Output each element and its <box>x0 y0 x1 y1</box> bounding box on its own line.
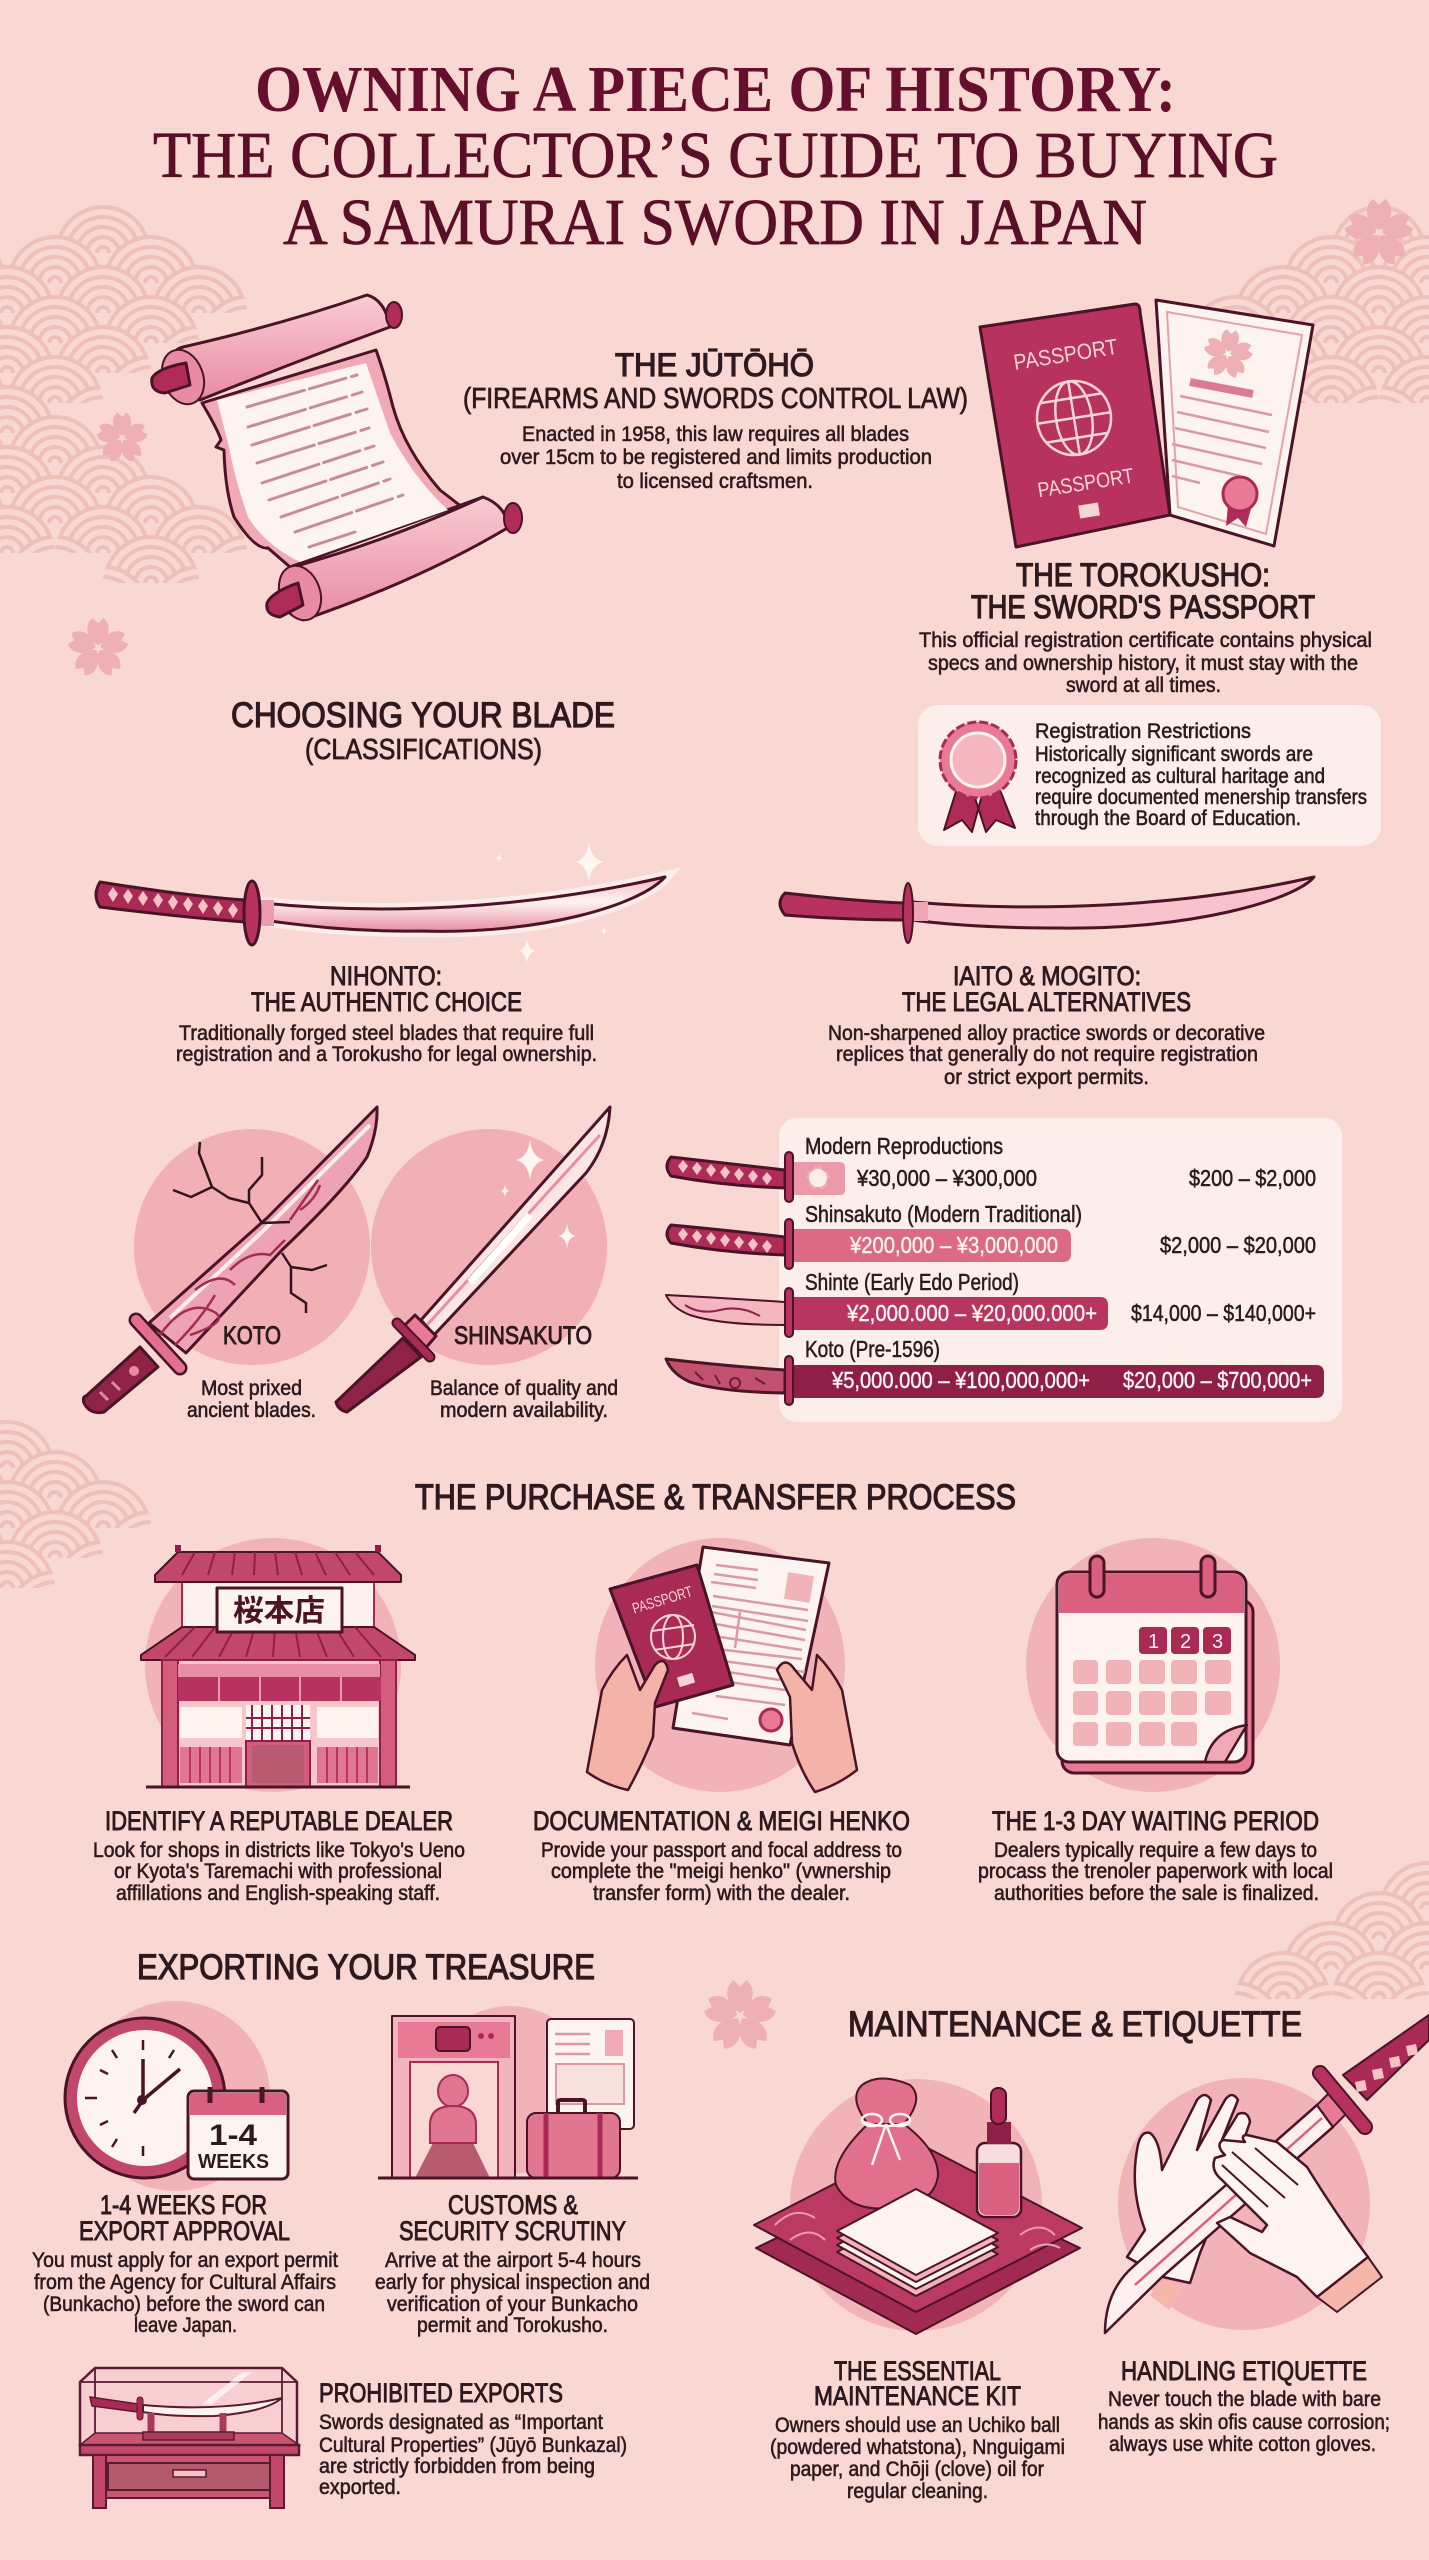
section: identify dealer text: Look for shops in districts like Tokyo's Ueno <box>93 1838 465 1862</box>
section: Torokusho text: THE TOROKUSHO: <box>1016 557 1270 593</box>
icon: blossom left <box>95 412 149 464</box>
passport cover text: PASSPORT <box>1012 334 1119 375</box>
shinsakuto blade <box>421 1107 610 1335</box>
mini calendar <box>188 2087 288 2179</box>
section: documentation text: complete the "meigi henko" (vwnership <box>551 1859 891 1883</box>
section: waiting period text: authorities before the sale is finalized. <box>994 1881 1319 1905</box>
row: koto: ¥5,000.000 – ¥100,000,000+ <box>831 1367 1090 1393</box>
row: shinte: Shinte (Early Edo Period) <box>805 1269 1019 1295</box>
row: koto <box>666 1336 1324 1405</box>
section: customs text: Arrive at the airport 5-4 hours <box>385 2248 641 2272</box>
row: shinsakuto <box>667 1201 1316 1269</box>
section: export approval text: leave Japan. <box>134 2313 237 2337</box>
person <box>415 2075 490 2178</box>
section: Jutoho text: (FIREARMS AND SWORDS CONTROL LAW) <box>463 383 968 415</box>
section: iaito text: IAITO & MOGITO: <box>953 961 1141 991</box>
parchment <box>202 350 483 567</box>
section: prohibited exports text <box>319 2378 627 2499</box>
section: nihonto text <box>176 961 597 1066</box>
section: Jutoho text: THE JŪTŌHŌ <box>615 347 814 383</box>
section: maintenance kit text: paper, and Chōji (clove) oil for <box>790 2457 1044 2481</box>
sword in case <box>90 2397 282 2420</box>
section: iaito text: or strict export permits. <box>944 1065 1149 1089</box>
illustration: shinsakuto: modern availability. <box>440 1398 608 1422</box>
left forearm <box>1150 2280 1182 2310</box>
section: maintenance kit text: regular cleaning. <box>847 2479 988 2503</box>
row: modern reproductions <box>667 1133 1316 1202</box>
illustration: shinsakuto: SHINSAKUTO <box>454 1322 592 1350</box>
heading: choosing your blade <box>231 696 615 766</box>
icon: shop <box>141 1538 415 1792</box>
row: shinsakuto: $2,000 – $20,000 <box>1160 1232 1316 1258</box>
icon: passport and certificate: PASSPORT <box>1036 464 1136 502</box>
section: documentation text <box>533 1806 910 1905</box>
shinsakuto handle and guard <box>336 1315 436 1412</box>
days 1 2 3: 1 <box>1148 1631 1159 1653</box>
globe <box>1032 376 1116 460</box>
section: waiting period text <box>978 1806 1333 1905</box>
panel: registration restrictions: require documented menership transfers <box>1035 785 1367 809</box>
cloth bag <box>835 2078 938 2209</box>
section: maintenance kit text <box>770 2356 1065 2503</box>
icon: white gloves handling sword <box>1105 2015 1429 2333</box>
right glove <box>1214 2135 1368 2297</box>
section: export approval text: 1-4 WEEKS FOR <box>100 2190 267 2220</box>
icon: clock and calendar <box>65 2001 288 2191</box>
icon: rosette <box>940 722 1016 832</box>
bottom roller <box>267 497 522 626</box>
illustration: shinsakuto: Balance of quality and <box>430 1376 618 1400</box>
mini calendar: 1-4 <box>209 2119 257 2152</box>
koto blade <box>149 1107 377 1353</box>
section: documentation text: transfer form) with the dealer. <box>593 1881 850 1905</box>
icon: scroll <box>152 295 522 626</box>
section: maintenance kit text: (powdered whatstona), Nnguigami <box>770 2435 1065 2459</box>
row: shinsakuto: ¥200,000 – ¥3,000,000 <box>849 1232 1058 1258</box>
left hand <box>587 1655 668 1790</box>
illustration: shinsakuto <box>336 1107 618 1422</box>
section: handling etiquette text: always use white cotton gloves. <box>1109 2432 1376 2456</box>
section: identify dealer text: or Kyota's Taremachi with professional <box>114 1859 442 1883</box>
section: prohibited exports text: Cultural Properties” (Jūyō Bunkazal) <box>319 2433 627 2457</box>
section: nihonto text: Traditionally forged steel blades that require full <box>179 1021 594 1045</box>
section: customs text: verification of your Bunkacho <box>387 2292 638 2316</box>
panel: registration restrictions: through the Board of Education. <box>1035 806 1301 830</box>
title: THE COLLECTOR’S GUIDE TO BUYING <box>153 119 1278 192</box>
section: maintenance kit text: THE ESSENTIAL <box>834 2356 1001 2386</box>
section: waiting period text: Dealers typically require a few days to <box>994 1838 1317 1862</box>
section: iaito text: replices that generally do not require registration <box>836 1042 1258 1066</box>
right hand <box>777 1655 857 1792</box>
papers <box>837 2189 998 2296</box>
title: A SAMURAI SWORD IN JAPAN <box>283 186 1147 259</box>
section: export approval text: EXPORT APPROVAL <box>79 2216 290 2246</box>
row: shinte <box>666 1269 1316 1337</box>
section: prohibited exports text: Swords designated as “Important <box>319 2410 603 2434</box>
section: Jutoho text <box>463 347 968 493</box>
row: shinte: ¥2,000.000 – ¥20,000.000+ <box>846 1300 1097 1326</box>
section: handling etiquette text: HANDLING ETIQUETTE <box>1121 2356 1367 2386</box>
panel: registration restrictions: Registration Restrictions <box>1035 719 1251 743</box>
days 1 2 3: 3 <box>1212 1631 1223 1653</box>
heading: maintenance: MAINTENANCE & ETIQUETTE <box>848 2005 1302 2044</box>
icon: calendar <box>1026 1538 1280 1792</box>
panel: registration restrictions: Historically significant swords are <box>1035 742 1313 766</box>
section: nihonto text: NIHONTO: <box>330 961 442 991</box>
section: export approval text: (Bunkacho) before the sword can <box>43 2292 325 2316</box>
left glove <box>1127 2095 1250 2283</box>
heading: exporting: EXPORTING YOUR TREASURE <box>137 1948 595 1987</box>
illustration: nihonto sword <box>96 842 665 963</box>
title: OWNING A PIECE OF HISTORY: <box>255 53 1176 126</box>
icon: blossom lower left <box>66 618 130 678</box>
section: identify dealer text: IDENTIFY A REPUTABLE DEALER <box>105 1806 453 1836</box>
section: Torokusho text: This official registration certificate contains physical <box>919 628 1372 652</box>
icon: display case <box>80 2368 299 2508</box>
section: handling etiquette text <box>1098 2356 1390 2456</box>
shop sign: 桜本店 <box>233 1595 325 1628</box>
illustration: koto: KOTO <box>223 1322 281 1350</box>
section: maintenance kit text: Owners should use an Uchiko ball <box>775 2413 1060 2437</box>
row: modern reproductions: ¥30,000 – ¥300,000 <box>856 1165 1037 1191</box>
top roller <box>152 295 402 410</box>
days 1 2 3: 2 <box>1180 1631 1191 1653</box>
section: prohibited exports text: exported. <box>319 2475 401 2499</box>
right forearm <box>1317 2257 1382 2312</box>
section: waiting period text: THE 1-3 DAY WAITING PERIOD <box>992 1806 1319 1836</box>
cloth <box>754 2142 1082 2334</box>
section: Torokusho text: sword at all times. <box>1066 673 1221 697</box>
certificate <box>1156 300 1313 546</box>
illustration: koto: ancient blades. <box>187 1398 316 1422</box>
decorative wave pattern: lower right <box>1235 1861 1429 1999</box>
panel: registration restrictions: recognized as cultural haritage and <box>1035 764 1325 788</box>
section: Jutoho text: to licensed craftsmen. <box>617 469 813 493</box>
section: documentation text: Provide your passport and focal address to <box>541 1838 902 1862</box>
section: prohibited exports text: are strictly forbidden from being <box>319 2454 595 2478</box>
title <box>153 53 1278 259</box>
document <box>547 2019 634 2129</box>
decorative wave pattern: middle left <box>0 1420 151 1588</box>
heading: choosing your blade: CHOOSING YOUR BLADE <box>231 696 615 735</box>
section: customs text: early for physical inspection and <box>375 2270 650 2294</box>
row: koto: $20,000 – $700,000+ <box>1123 1367 1312 1393</box>
section: prohibited exports text: PROHIBITED EXPORTS <box>319 2378 563 2408</box>
illustration: koto: Most prixed <box>201 1376 302 1400</box>
section: Jutoho text: over 15cm to be registered and limits production <box>500 445 932 469</box>
icon: maintenance kit <box>754 2078 1082 2334</box>
icon: hands holding passport and form <box>587 1538 857 1792</box>
passport: PASSPORT <box>630 1583 695 1618</box>
illustration: koto <box>83 1107 377 1422</box>
section: iaito text: Non-sharpened alloy practice swords or decorative <box>828 1021 1265 1045</box>
section: export approval text: You must apply for an export permit <box>32 2248 338 2272</box>
decorative wave pattern: upper left <box>0 205 247 583</box>
oil bottle <box>977 2088 1021 2217</box>
mini calendar: WEEKS <box>198 2151 269 2173</box>
row: koto: Koto (Pre-1596) <box>805 1336 940 1362</box>
section: Torokusho text: THE SWORD'S PASSPORT <box>971 589 1315 625</box>
section: export approval text <box>32 2190 338 2337</box>
section: handling etiquette text: Never touch the blade with bare <box>1108 2387 1381 2411</box>
section: nihonto text: registration and a Torokusho for legal ownership. <box>176 1042 597 1066</box>
section: nihonto text: THE AUTHENTIC CHOICE <box>251 987 522 1017</box>
section: customs text: permit and Torokusho. <box>417 2313 608 2337</box>
katana <box>1105 2015 1429 2333</box>
cracks <box>173 1142 327 1313</box>
panel: price table <box>666 1118 1342 1422</box>
panel: registration restrictions <box>918 705 1381 846</box>
section: export approval text: from the Agency for Cultural Affairs <box>34 2270 336 2294</box>
passport <box>610 1565 733 1707</box>
section: Torokusho text: specs and ownership history, it must stay with the <box>928 651 1358 675</box>
section: waiting period text: procass the trenoler paperwork with local <box>978 1859 1333 1883</box>
illustration: iaito sword <box>780 877 1314 943</box>
row: shinsakuto: Shinsakuto (Modern Traditional) <box>805 1201 1082 1227</box>
decorative wave pattern: upper right <box>1187 205 1429 403</box>
heading: choosing your blade: (CLASSIFICATIONS) <box>305 734 542 766</box>
section: iaito text <box>828 961 1265 1089</box>
section: customs text: SECURITY SCRUTINY <box>399 2216 626 2246</box>
section: documentation text: DOCUMENTATION & MEIGI HENKO <box>533 1806 910 1836</box>
icon: blossom centre <box>702 1980 778 2052</box>
section: iaito text: THE LEGAL ALTERNATIVES <box>902 987 1191 1017</box>
section: maintenance kit text: MAINTENANCE KIT <box>814 2381 1021 2411</box>
section: customs text: CUSTOMS & <box>448 2190 578 2220</box>
suitcase <box>527 2100 620 2178</box>
section: Jutoho text: Enacted in 1958, this law requires all blades <box>522 422 909 446</box>
icon: customs gate and luggage <box>378 2006 638 2178</box>
section: identify dealer text: affillations and English-speaking staff. <box>116 1881 440 1905</box>
icon: blossom upper right <box>1343 199 1415 268</box>
koto handle and guard <box>83 1320 180 1413</box>
section: handling etiquette text: hands as skin ofis cause corrosion; <box>1098 2410 1390 2434</box>
section: Torokusho text <box>919 557 1372 697</box>
shop sign <box>217 1588 342 1632</box>
days 1 2 3 <box>1139 1627 1231 1654</box>
icon: passport and certificate <box>980 300 1313 547</box>
section: identify dealer text <box>93 1806 465 1905</box>
row: modern reproductions: Modern Reproductions <box>805 1133 1003 1159</box>
row: modern reproductions: $200 – $2,000 <box>1189 1165 1316 1191</box>
section: customs text <box>375 2190 650 2337</box>
form <box>673 1547 829 1745</box>
row: shinte: $14,000 – $140,000+ <box>1131 1300 1316 1326</box>
heading: purchase process: THE PURCHASE & TRANSFER PROCESS <box>415 1478 1016 1517</box>
